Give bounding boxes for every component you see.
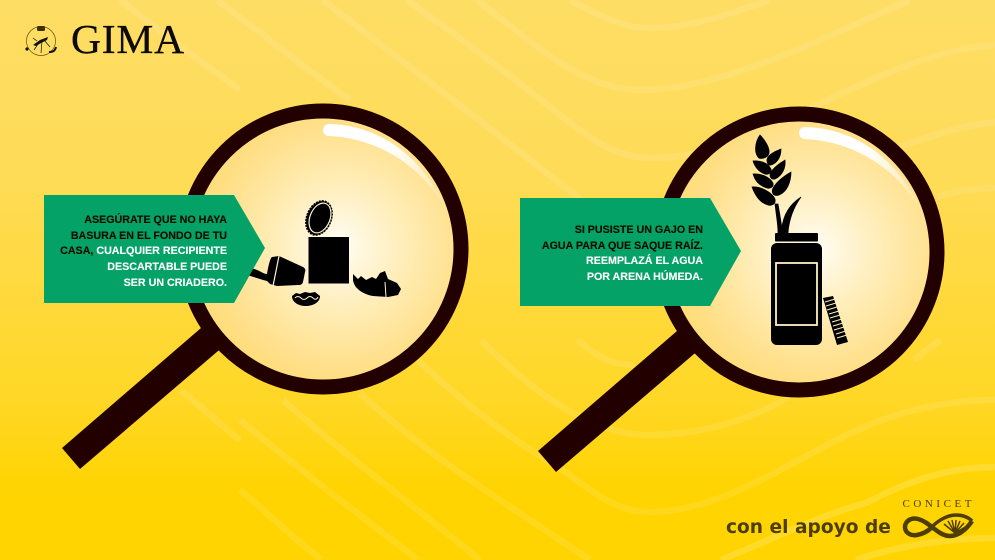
callout left: CASA, CUALQUIER RECIPIENTE xyxy=(60,245,227,257)
callout right xyxy=(520,198,741,306)
lens xyxy=(661,114,937,390)
jar label xyxy=(776,263,817,325)
callout left xyxy=(44,195,265,303)
CONICET label: CONICET xyxy=(902,498,972,510)
can lid xyxy=(301,197,337,239)
icon: plant in jar xyxy=(752,135,848,345)
lens highlight xyxy=(799,127,921,211)
footer: support credit xyxy=(726,498,972,538)
eggshell xyxy=(353,271,401,297)
callout left: BASURA EN EL FONDO DE TU xyxy=(71,230,227,242)
magnifier right xyxy=(520,114,937,472)
logo wordmark: GIMA xyxy=(71,16,185,62)
lid on the side xyxy=(823,296,848,345)
callout right: AGUA PARA QUE SAQUE RAÍZ. xyxy=(542,239,703,252)
callout right: REEMPLAZÁ EL AGUA xyxy=(586,254,703,267)
callout right: SI PUSISTE UN GAJO EN xyxy=(575,224,703,236)
magnifier left xyxy=(44,111,461,469)
small shell xyxy=(292,292,320,306)
handle xyxy=(62,325,235,469)
callout left: ASEGÚRATE QUE NO HAYA xyxy=(84,213,227,226)
handle xyxy=(538,328,711,472)
lens xyxy=(185,111,461,387)
jar lid xyxy=(775,233,818,242)
icon: trash xyxy=(247,197,401,306)
icon: mosquito emblem xyxy=(25,26,56,56)
lens highlight xyxy=(323,124,445,208)
callout left: SER UN CRIADERO. xyxy=(124,277,227,289)
can xyxy=(308,237,349,284)
bottle xyxy=(247,256,305,286)
support text: con el apoyo de xyxy=(726,517,891,538)
wheat xyxy=(752,135,801,233)
callout left: DESCARTABLE PUEDE xyxy=(107,261,227,273)
icon: CONICET infinity logo xyxy=(905,515,972,536)
jar xyxy=(771,243,822,345)
callout right: POR ARENA HÚMEDA. xyxy=(587,270,703,283)
logo: GIMA xyxy=(25,16,185,62)
